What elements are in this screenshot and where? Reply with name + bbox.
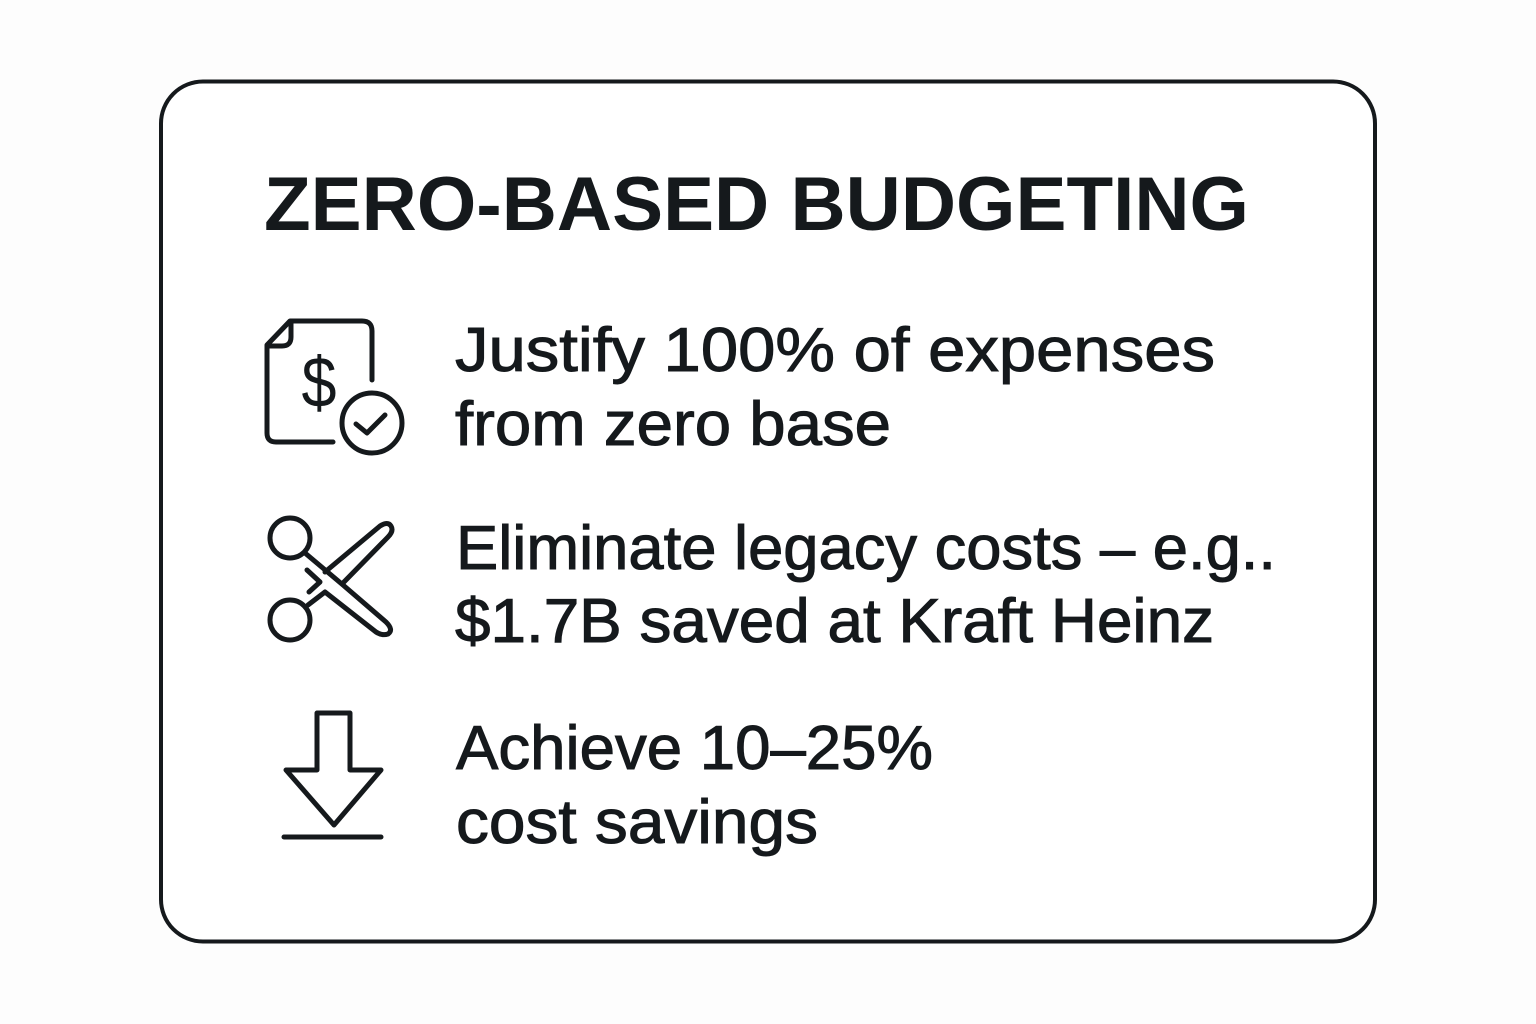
title: ZERO-BASED BUDGETING	[264, 162, 1249, 247]
icon: document with dollar and check	[267, 321, 402, 453]
text: eliminate legacy costs: $1.7B saved at Kraft Heinz	[455, 587, 1214, 656]
text: achieve savings: Achieve 10–25%	[456, 714, 933, 783]
text: eliminate legacy costs	[455, 514, 1276, 656]
text: justify expenses: Justify 100% of expenses	[455, 316, 1215, 385]
icon: down arrow	[284, 713, 381, 837]
text: justify expenses	[455, 316, 1215, 459]
text: achieve savings	[456, 714, 933, 857]
text: justify expenses: from zero base	[455, 390, 891, 459]
icon glyph: dollar sign: $	[302, 344, 336, 423]
icon: scissors	[270, 518, 392, 640]
panel: card	[161, 82, 1375, 942]
text: eliminate legacy costs: Eliminate legacy costs – e.g..	[456, 514, 1276, 583]
text: achieve savings: cost savings	[456, 788, 818, 857]
